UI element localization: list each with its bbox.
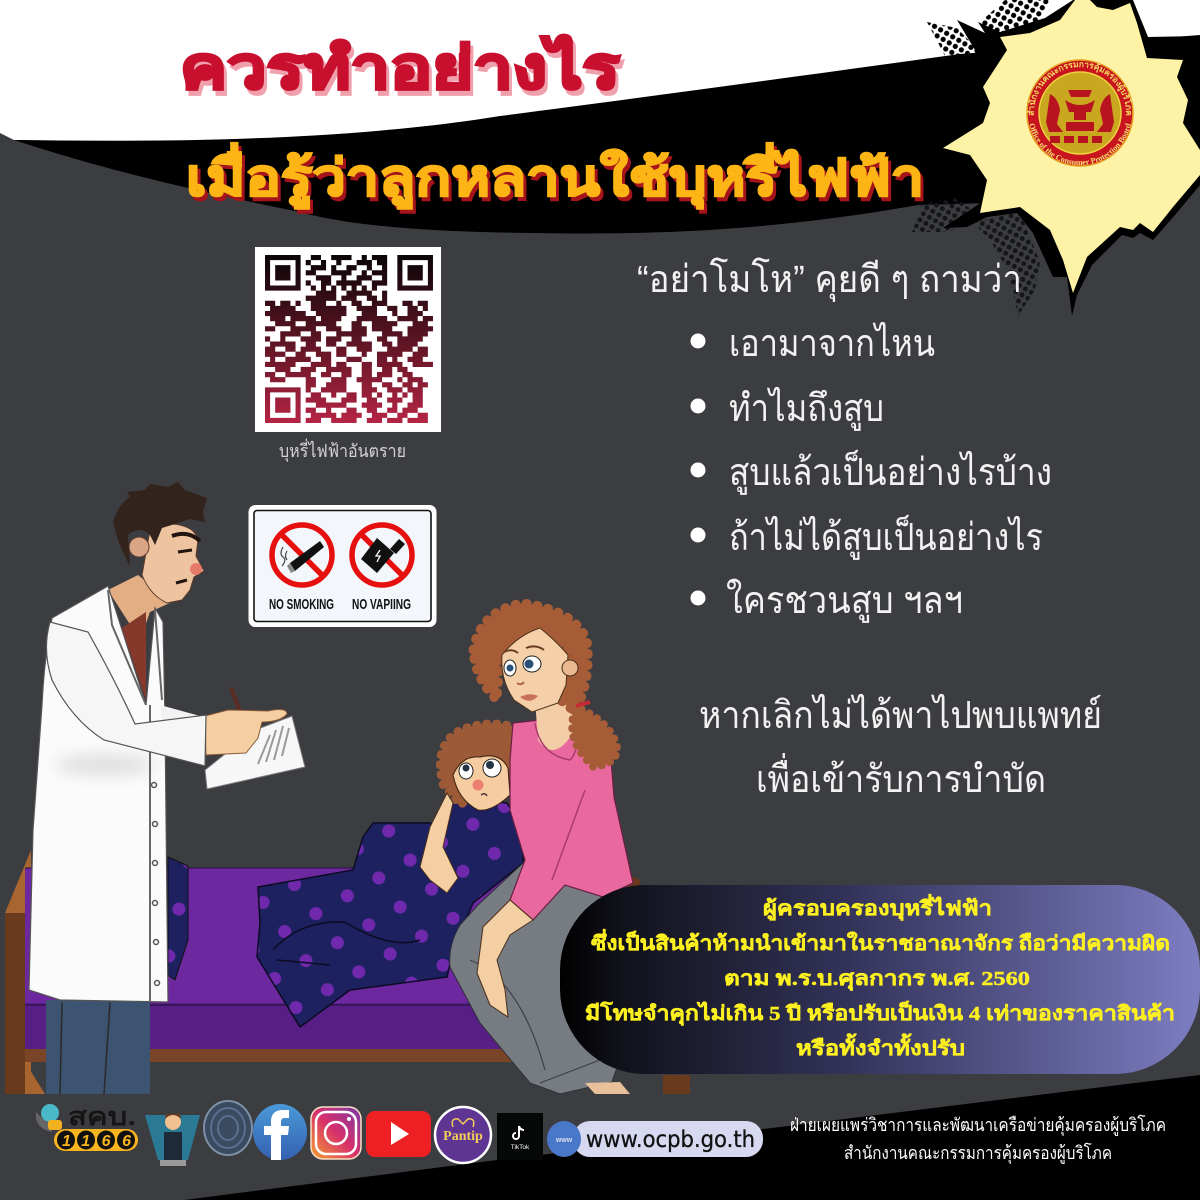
QR caption: บุหรี่ไฟฟ้าอันตราย <box>279 438 406 462</box>
head <box>142 524 204 603</box>
bed <box>5 850 690 1094</box>
mother <box>420 603 640 1094</box>
doctor <box>29 482 305 1094</box>
hair <box>113 482 207 566</box>
tiktok icon <box>497 1113 543 1160</box>
website pill: www.ocpb.go.th <box>586 1127 755 1153</box>
facebook icon <box>253 1104 307 1160</box>
hotline 1166 logo: สคบ. <box>68 1103 136 1131</box>
question 1: เอามาจากไหน <box>729 322 935 365</box>
mother's lower arm <box>477 900 533 1017</box>
question 2 <box>690 387 884 431</box>
child hair <box>440 723 523 805</box>
seal emblem <box>1046 90 1114 143</box>
ponytail <box>572 705 617 767</box>
QR code panel <box>255 247 441 432</box>
question list <box>690 322 1052 623</box>
blanket <box>257 797 523 1027</box>
facial features <box>504 646 544 701</box>
hand <box>205 710 287 755</box>
illustration: doctor with mother and child on bed <box>5 482 690 1094</box>
shirt <box>122 612 146 700</box>
OCPB seal: Office of the Consumer Protection Board <box>1030 123 1131 165</box>
jeans <box>450 863 640 1094</box>
burst black outline <box>925 0 1200 316</box>
logo row <box>36 1101 763 1166</box>
far sleeve <box>160 705 222 735</box>
tiktok icon: TikTok <box>511 1144 530 1151</box>
treatment advice: เพื่อเข้ารับการบำบัด <box>756 753 1046 801</box>
blanket and child <box>257 723 523 1027</box>
question 5: ใครชวนสูบ ฯลฯ <box>726 579 963 623</box>
brow eye mouth <box>172 534 200 541</box>
mascot icon <box>145 1114 200 1166</box>
legal notice text: ซึ่งเป็นสินค้าห้ามนำเข้ามาในราชอาณาจักร ถือว่ามีความผิด <box>591 928 1170 955</box>
treatment advice: หากเลิกไม่ได้พาไปพบแพทย์ <box>699 694 1102 737</box>
pen <box>231 688 241 714</box>
no smoking no vaping sign <box>248 505 436 627</box>
neck <box>535 700 576 750</box>
white header shape <box>0 0 1200 141</box>
footer credit <box>790 1114 1166 1164</box>
sweater <box>510 720 633 920</box>
title line 1: ควรทำอย่างไร <box>180 35 620 101</box>
OCPB round logo <box>204 1101 252 1155</box>
footer black wedge <box>184 1075 1200 1200</box>
foot <box>585 1082 630 1094</box>
coat shading <box>55 755 155 775</box>
website pill <box>547 1121 763 1157</box>
no smoking icon <box>272 525 332 585</box>
title line 2: เมื่อรู้ว่าลูกหลานใช้บุหรี่ไฟฟ้า <box>186 143 924 209</box>
hair <box>473 603 588 712</box>
trousers <box>46 1000 150 1094</box>
no vaping icon <box>352 525 412 585</box>
no smoking no vaping sign: NO VAPIING <box>352 596 411 613</box>
mother's hand on child <box>420 793 458 893</box>
hotline 1166 logo: 1166 <box>62 1133 131 1150</box>
coat buttons <box>152 782 160 986</box>
legal notice text: หรือทั้งจำทั้งปรับ <box>796 1033 965 1060</box>
child face <box>453 756 510 810</box>
treatment advice <box>699 694 1102 801</box>
legal notice text: ตาม พ.ร.บ.ศุลกากร พ.ศ. 2560 <box>724 968 1030 991</box>
legal notice text: ผู้ครอบครองบุหรี่ไฟฟ้า <box>763 893 992 922</box>
pantip icon <box>435 1107 491 1163</box>
question 4: ถ้าไม่ได้สูบเป็นอย่างไร <box>729 514 1043 560</box>
question 2: ทำไมถึงสูบ <box>729 387 884 431</box>
burst yellow fill <box>943 0 1200 293</box>
sleeve <box>46 622 206 766</box>
child eyes <box>459 759 501 796</box>
notepad <box>205 716 305 789</box>
footer credit: สำนักงานคณะกรรมการคุ้มครองผู้บริโภค <box>844 1142 1112 1164</box>
website pill: www <box>555 1137 573 1144</box>
question 3: สูบแล้วเป็นอย่างไรบ้าง <box>729 449 1052 495</box>
halftone burst dots <box>912 0 1050 316</box>
legal notice text <box>585 893 1175 1060</box>
sign labels: NO SMOKING <box>269 596 334 613</box>
QR modules <box>265 255 433 423</box>
seal lettering: สำนักงานคณะกรรมการคุ้มครองผู้บริโภค <box>1026 62 1132 116</box>
legal notice pill <box>560 885 1200 1074</box>
hotline 1166 logo <box>36 1103 138 1151</box>
lab coat <box>29 586 168 1002</box>
instagram icon <box>311 1107 361 1159</box>
youtube icon <box>366 1111 431 1157</box>
advice heading: “อย่าโมโห” คุยดี ๆ ถามว่า <box>637 257 1022 302</box>
face <box>502 628 568 712</box>
comic burst with seal <box>943 0 1200 316</box>
hair tie <box>576 702 590 706</box>
pantip icon: Pantip <box>443 1129 483 1144</box>
legal notice text: มีโทษจำคุกไม่เกิน 5 ปี หรือปรับเป็นเงิน 4 เท่าของราคาสินค้า <box>585 1000 1175 1026</box>
neck <box>108 575 172 640</box>
black swoosh band <box>14 35 1200 234</box>
OCPB seal <box>1026 59 1134 167</box>
